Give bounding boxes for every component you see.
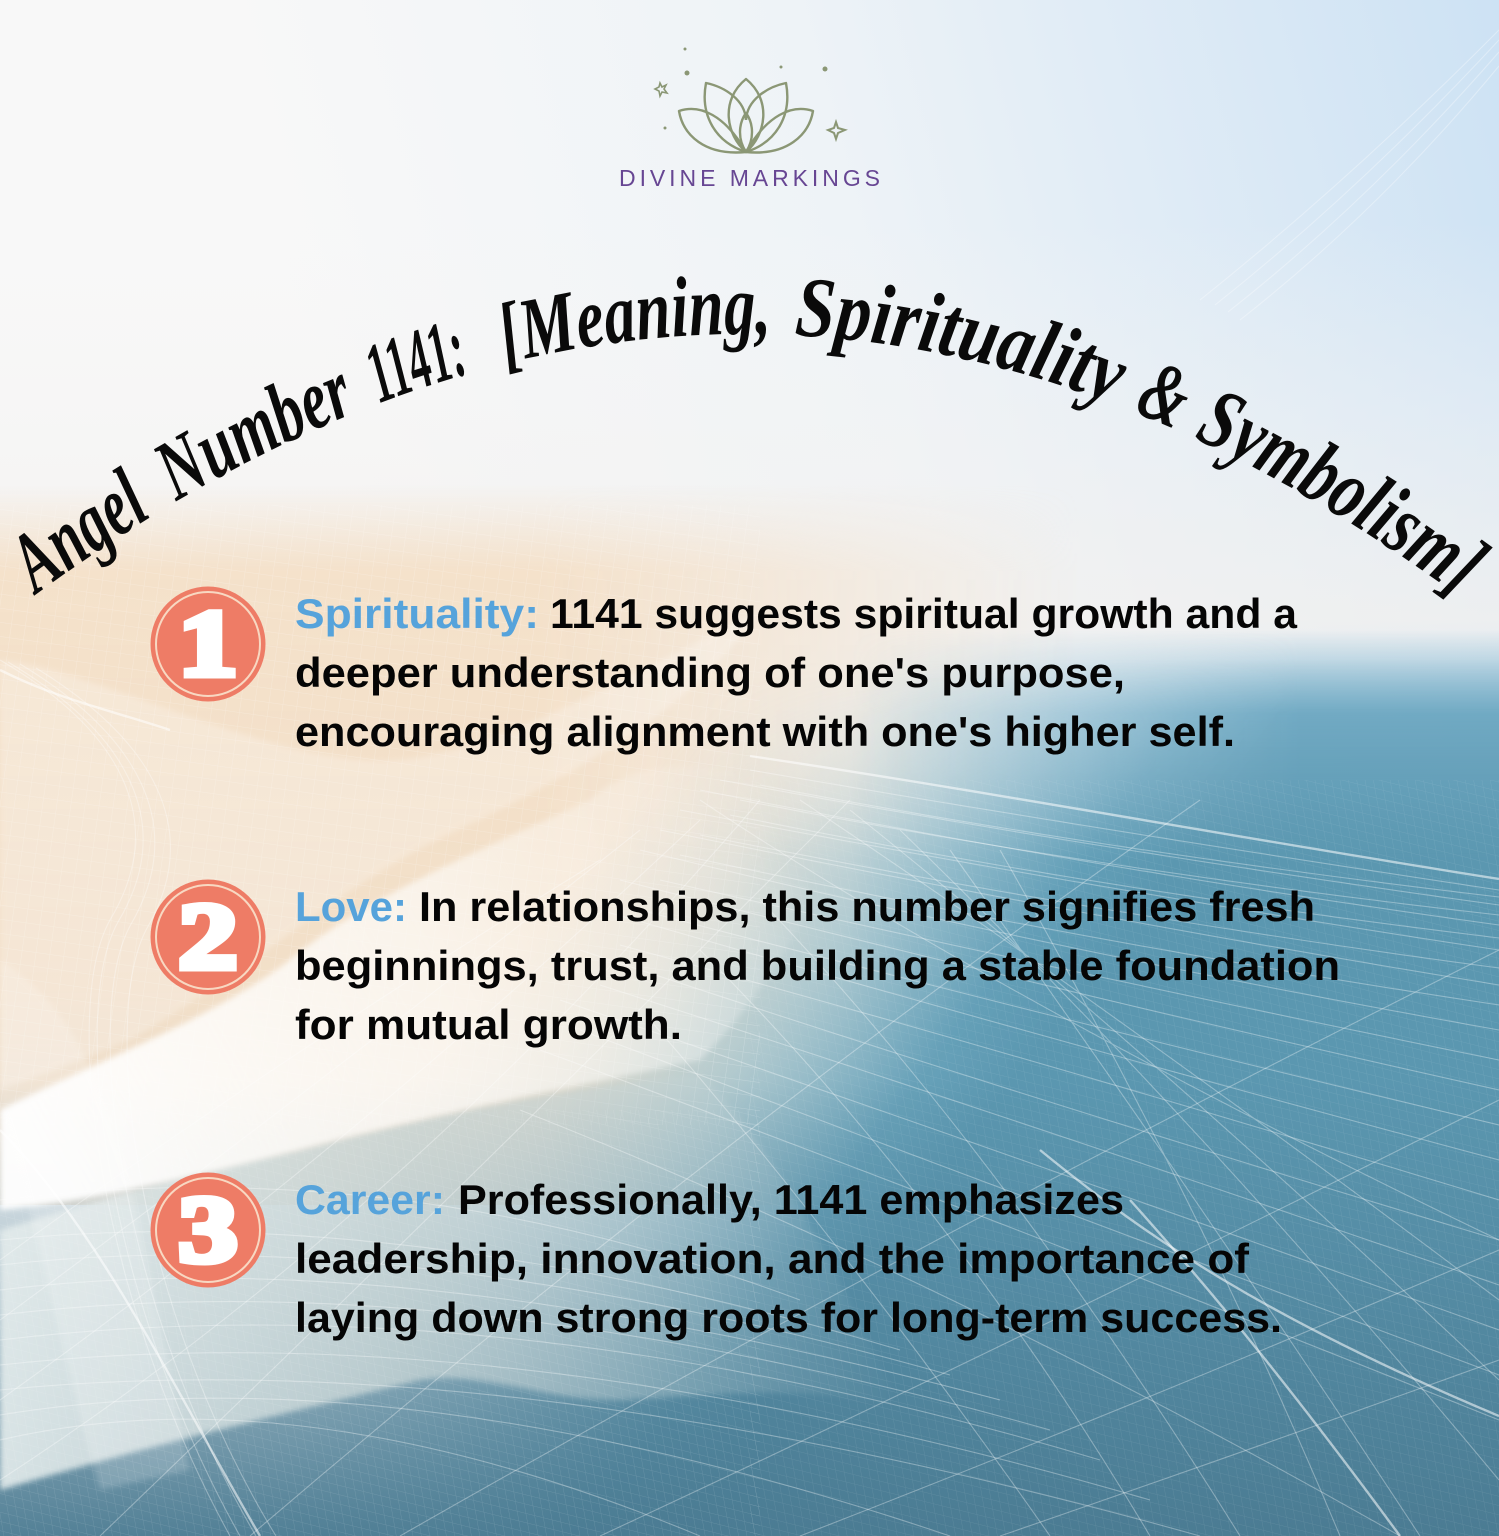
badge 3 [150,1172,266,1288]
text block 1: 1141 suggests spiritual growth and a [550,590,1298,637]
brand name: DIVINE MARKINGS [619,165,880,191]
title on arc [18,276,1493,600]
icon: stars [655,48,845,139]
badge 1: 1 [179,592,237,696]
logo: Divine Markings [619,48,880,191]
text block 3: leadership, innovation, and the importance of [295,1235,1250,1282]
text block 1: deeper understanding of one's purpose, [295,649,1125,696]
text block 1: encouraging alignment with one's higher self. [295,708,1235,755]
title on arc: Spirituality [796,280,1126,410]
text block 3: Professionally, 1141 emphasizes [458,1176,1124,1223]
title on arc: 1141: [368,324,464,403]
item 3: career [150,1172,1282,1341]
text block 3 [295,1176,1282,1341]
text block 2: for mutual growth. [295,1001,682,1048]
badge 1 [150,586,266,702]
icon: lotus [679,79,813,152]
badge 2: 2 [179,885,237,989]
text block 1 [295,590,1298,755]
title on arc: [Meaning, [502,276,766,374]
item 2: love [150,880,1340,1048]
text block 3: Career: [295,1176,445,1223]
text block 2: Love: [295,883,407,930]
title on arc: & [1138,366,1188,428]
item 1: spirituality [150,586,1298,755]
title on arc: Number [154,374,346,502]
text block 2: beginnings, trust, and building a stable foundation [295,942,1340,989]
text block 2: In relationships, this number signifies fresh [419,883,1315,930]
badge 2 [150,880,266,994]
badge 3: 3 [179,1178,237,1282]
text block 1: Spirituality: [295,590,539,637]
text block 2 [295,883,1340,1048]
text block 3: laying down strong roots for long-term success. [295,1294,1282,1341]
